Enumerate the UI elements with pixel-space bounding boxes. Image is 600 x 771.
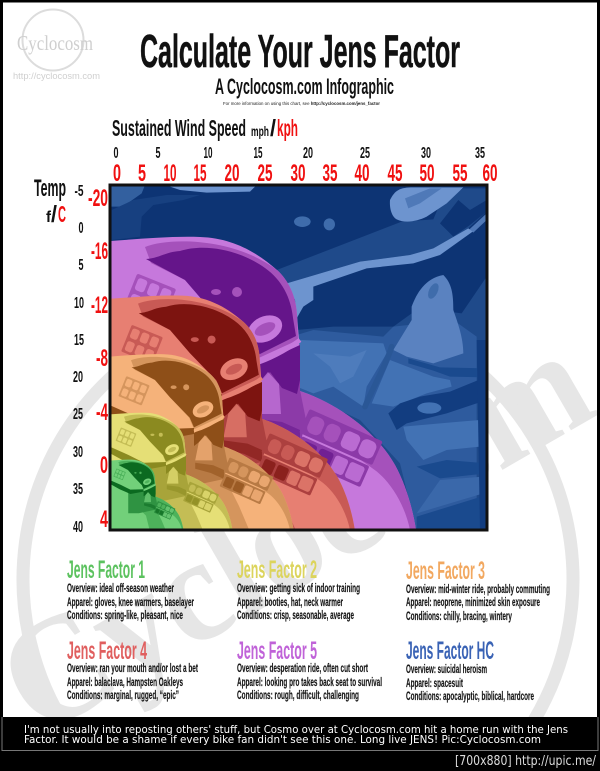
chart: Jens factor zones [110, 185, 488, 530]
legend: Jens Factor 4: Conditions: marginal, rugged, “epic” [67, 690, 179, 702]
celsius scale: 0 [100, 452, 108, 479]
legend: Jens Factor 1 [67, 556, 194, 622]
legend: Jens Factor 1: Jens Factor 1 [67, 556, 145, 584]
kph scale: 15 [194, 160, 206, 187]
mph scale: 30 [421, 145, 431, 162]
legend: Jens Factor 2 [237, 556, 360, 622]
text: C [58, 201, 66, 227]
legend: Jens Factor 1: Apparel: gloves, knee warmers, baselayer [67, 597, 194, 609]
legend: Jens Factor 2: Jens Factor 2 [237, 556, 317, 584]
caption bar: I'm not usually into reposting others' stuff, but Cosmo over at Cyclocosm.com hit a home run with the Jens [24, 723, 568, 736]
logo: Cyclocosm: Cyclocosm [17, 31, 93, 55]
legend: Jens Factor 1: Overview: ideal off-season weather [67, 583, 174, 595]
legend: Jens Factor 4: Overview: ran your mouth and/or lost a bet [67, 663, 198, 675]
legend: Jens Factor 3: Jens Factor 3 [406, 557, 485, 585]
celsius scale: -4 [96, 399, 108, 426]
kph scale: 60 [482, 160, 498, 187]
legend: Jens Factor 5: Conditions: rough, difficult, challenging [237, 690, 359, 702]
legend: Jens Factor 3 [406, 557, 550, 623]
legend: Jens Factor HC [406, 637, 534, 703]
kph scale: 45 [388, 160, 402, 187]
wind speed axis heading: kph [277, 115, 298, 141]
legend: Jens Factor 2: Apparel: booties, hat, neck warmer [237, 597, 343, 609]
legend: Jens Factor 5: Overview: desperation ride, often cut short [237, 663, 368, 675]
fahrenheit scale: 35 [73, 481, 83, 498]
legend: Jens Factor HC: Jens Factor HC [406, 637, 494, 665]
temperature axis heading: f [46, 209, 52, 226]
kph scale: 5 [138, 160, 146, 187]
kph scale: 0 [113, 160, 121, 187]
celsius scale [88, 185, 108, 533]
temperature axis heading: Temp [34, 175, 66, 202]
kph scale: 20 [224, 160, 240, 187]
legend: Jens Factor HC: Apparel: spacesuit [406, 678, 463, 690]
fahrenheit scale: 30 [73, 444, 83, 461]
legend: Jens Factor 2: Overview: getting sick of indoor training [237, 583, 360, 595]
logo: Cyclocosm: http://cyclocosm.com [13, 71, 100, 81]
kph scale: 30 [290, 160, 306, 187]
mph scale: 5 [156, 145, 161, 162]
celsius scale: -8 [96, 345, 108, 372]
legend: Jens Factor HC: Overview: suicidal heroism [406, 664, 487, 676]
legend: Jens Factor 5: Apparel: looking pro takes back seat to survival [237, 677, 382, 689]
celsius scale: -20 [88, 185, 108, 212]
legend: Jens Factor 5 [237, 637, 382, 702]
fahrenheit scale: 40 [73, 519, 83, 536]
kph scale: 35 [322, 160, 338, 187]
fahrenheit scale: 5 [78, 257, 84, 274]
mph scale: 15 [254, 145, 263, 162]
celsius scale: -12 [91, 292, 108, 319]
celsius scale: 4 [100, 506, 108, 533]
fahrenheit scale: 0 [78, 220, 84, 237]
fahrenheit scale: 20 [73, 369, 83, 386]
zone: Jens Factor 1 [110, 460, 183, 530]
legend: Jens Factor 4: Jens Factor 4 [67, 637, 147, 665]
subtitle: A Cyclocosm.com Infographic [215, 74, 394, 99]
mph scale: 10 [204, 145, 212, 162]
legend: Jens Factor 4: Apparel: balaclava, Hampsten Oakleys [67, 677, 183, 689]
zone: Jens Factor 2 [110, 413, 232, 530]
legend: Jens Factor 5: Jens Factor 5 [237, 637, 317, 665]
legend: Jens Factor 3: Conditions: chilly, bracing, wintery [406, 611, 512, 623]
wind speed axis heading: / [270, 115, 277, 141]
wind speed axis heading: mph [251, 123, 269, 139]
celsius scale: -16 [91, 238, 108, 265]
mph scale: 35 [475, 145, 485, 162]
fahrenheit scale: 15 [74, 332, 84, 349]
legend: Jens Factor 2: Conditions: crisp, seasonable, average [237, 610, 354, 622]
zone: Jens Factor 4 [110, 295, 355, 530]
kph scale: 50 [420, 160, 434, 187]
fahrenheit scale: -5 [74, 183, 84, 200]
kph scale: 40 [354, 160, 370, 187]
temperature axis heading [34, 175, 66, 227]
kph scale: 25 [258, 160, 272, 187]
legend: Jens Factor 1: Conditions: spring-like, pleasant, nice [67, 610, 183, 622]
logo: Cyclocosm [13, 10, 100, 81]
mph scale: 25 [360, 145, 370, 162]
caption bar [0, 717, 600, 771]
kph scale [113, 160, 498, 187]
mph scale: 0 [114, 145, 118, 162]
temperature axis heading: / [51, 201, 58, 227]
small note: For more information on using this chart, see http://cyclocosm.com/jens_factor [223, 101, 380, 106]
legend: Jens Factor 4 [67, 637, 198, 702]
chart frame [110, 185, 487, 530]
zone: Jens Factor 5 [110, 237, 416, 530]
fahrenheit scale: 25 [73, 406, 83, 423]
fahrenheit scale: 10 [74, 295, 84, 312]
fahrenheit scale [73, 183, 84, 536]
mph scale: 20 [303, 145, 313, 162]
kph scale: 10 [164, 160, 176, 187]
mph scale [114, 145, 485, 162]
zone: Jens Factor HC [110, 185, 488, 530]
kph scale: 55 [452, 160, 468, 187]
caption bar: Factor. It would be a shame if every bike fan didn't see this one. Long live JENS! Pic:Cyclocosm.com [24, 733, 541, 746]
wind speed axis heading: Sustained Wind Speed [112, 115, 246, 141]
zone: Jens Factor 3 [110, 354, 294, 530]
